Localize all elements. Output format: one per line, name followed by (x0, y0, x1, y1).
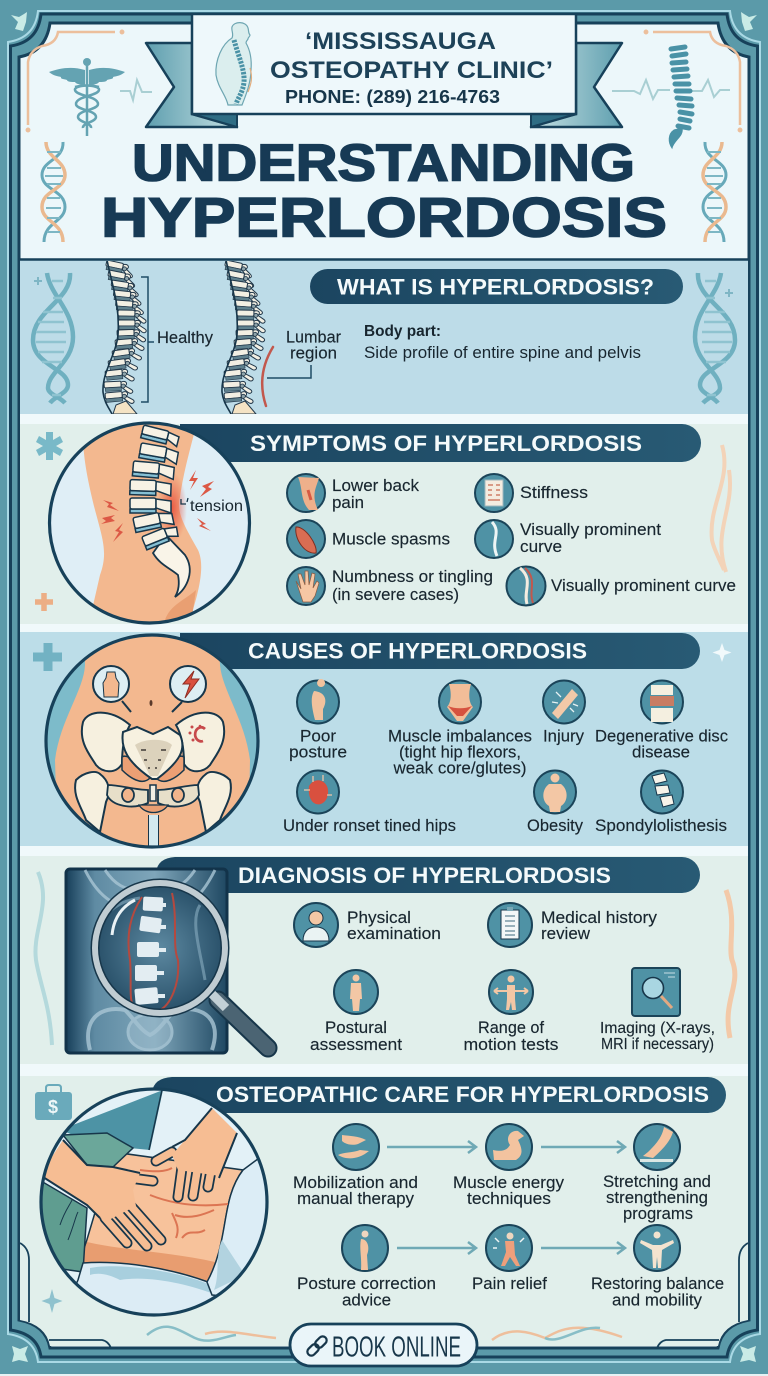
icon: link (306, 1335, 328, 1357)
inflammation mark (188, 725, 205, 742)
diagnosis: medical history: Medical history (541, 908, 658, 927)
icon: medical case (35, 1085, 72, 1120)
heading: WHAT IS HYPERLORDOSIS? (337, 274, 654, 300)
title: HYPERLORDOSIS (101, 186, 667, 248)
care: posture correction (297, 1225, 436, 1310)
icon: teal plus (33, 643, 62, 671)
arrow (397, 1242, 476, 1254)
panel: what is hyperlordosis (19, 259, 749, 424)
panel: osteopathic care (20, 1076, 748, 1346)
callout: spine joint (93, 666, 131, 712)
care: mobilization: manual therapy (297, 1189, 414, 1208)
care: posture correction: Posture correction (297, 1274, 436, 1293)
label: lumbar region (286, 328, 341, 362)
heading pill (156, 857, 700, 893)
symptom: stiffness: Stiffness (520, 483, 588, 502)
cause: injury: Injury (543, 726, 584, 746)
clinic name: ‘MISSISSAUGA (305, 28, 496, 55)
body part text (364, 323, 641, 362)
icon: DNA right (695, 273, 735, 403)
cause: muscle imbalances: Muscle imbalances (388, 726, 532, 746)
cause: degenerative disc (595, 680, 728, 762)
arrow (541, 1141, 625, 1153)
icon: red lumbar curve (262, 347, 273, 406)
body part text: Side profile of entire spine and pelvis (364, 344, 641, 362)
symptom: numbness (287, 567, 493, 605)
symptom: lower back pain (287, 474, 419, 512)
header (27, 31, 741, 242)
label: lumbar region: Lumbar (286, 328, 341, 346)
cause: poor posture: Poor (300, 726, 336, 746)
care: restoring balance (591, 1225, 724, 1310)
label: BOOK ONLINE (332, 1332, 461, 1364)
icon: medical star (36, 432, 63, 460)
icon: DNA left (42, 142, 65, 242)
cause: spondylolisthesis (595, 770, 727, 835)
symptom: prominent curve two: Visually prominent curve (551, 576, 736, 595)
arrow (387, 1141, 476, 1153)
diagnosis: range of motion (464, 970, 558, 1054)
heading pill (180, 424, 701, 462)
icon: pain bolts (101, 470, 214, 542)
care: stretching (603, 1124, 711, 1223)
diagnosis: imaging (600, 968, 715, 1053)
pointer line (267, 365, 311, 378)
illustration: pelvis (46, 630, 258, 860)
book online button (290, 1324, 477, 1366)
care: mobilization (293, 1124, 418, 1208)
cause: obesity (527, 770, 583, 835)
symptom: lower back pain: Lower back (332, 476, 419, 495)
callout: lightning pain (170, 666, 206, 712)
diagnosis: range of motion: motion tests (464, 1035, 558, 1054)
diagnosis: physical examination: examination (347, 924, 441, 943)
icon: sparkle (712, 643, 732, 662)
care: stretching: Stretching and (603, 1172, 711, 1191)
care: muscle energy: Muscle energy (453, 1173, 564, 1192)
diagnosis: medical history (488, 903, 658, 947)
heading: SYMPTOMS OF HYPERLORDOSIS (250, 431, 642, 456)
icon: ECG line right (612, 80, 730, 99)
symptom: prominent curve (475, 520, 661, 558)
heading pill (310, 269, 683, 304)
bracket (141, 277, 154, 402)
diagnosis: medical history: review (541, 924, 591, 943)
symptom: lower back pain: pain (332, 493, 364, 512)
cause: obesity: Obesity (527, 816, 583, 835)
illustration: lower spine close-up (50, 415, 250, 640)
heading pill (180, 633, 700, 669)
care: restoring balance: and mobility (612, 1290, 702, 1310)
panel: diagnosis (12, 856, 756, 1366)
care: pain relief (472, 1225, 547, 1293)
heading: OSTEOPATHIC CARE FOR HYPERLORDOSIS (216, 1082, 709, 1107)
corner ornaments bottom (12, 1346, 756, 1362)
wave decoration (712, 445, 730, 572)
cause: muscle imbalances (388, 680, 532, 778)
symptom: prominent curve: Visually prominent (520, 520, 661, 539)
care: muscle energy: techniques (467, 1189, 551, 1208)
symptom: numbness: Numbness or tingling (332, 567, 493, 586)
care: pain relief: Pain relief (472, 1274, 547, 1293)
arrow (541, 1242, 625, 1254)
diagnosis: range of motion: Range of (478, 1018, 544, 1037)
icon: spine right (669, 47, 692, 148)
chart: healthy spine (103, 260, 146, 414)
cause: poor posture: posture (289, 742, 347, 762)
heading pill (152, 1077, 726, 1113)
title (101, 134, 667, 248)
care: muscle energy (453, 1124, 564, 1208)
banner plate (192, 14, 576, 114)
icon: body with spine (216, 23, 251, 105)
clinic name: PHONE: (289) 216-4763 (285, 87, 500, 107)
clinic name (270, 28, 553, 107)
diagnosis: physical examination: Physical (347, 908, 411, 927)
symptom: muscle spasms: Muscle spasms (332, 530, 450, 548)
icon: DNA right (703, 142, 726, 242)
icon: orange plus (35, 593, 53, 611)
cause: muscle imbalances: weak core/glutes) (393, 758, 526, 778)
cause: muscle imbalances: (tight hip flexors, (399, 742, 521, 762)
icon: DNA left (33, 273, 73, 403)
icon: caduceus (49, 58, 125, 136)
symptom: prominent curve two (506, 566, 736, 606)
care: stretching: programs (623, 1204, 693, 1223)
chart: hyperlordotic spine (222, 260, 265, 414)
cause: poor posture (289, 679, 347, 762)
heading: DIAGNOSIS OF HYPERLORDOSIS (238, 863, 611, 888)
diagnosis: postural assessment (310, 970, 402, 1054)
ribbon left (146, 43, 237, 127)
icon: medical case: $ (48, 1097, 58, 1117)
label: lumbar region: region (290, 344, 337, 362)
icon: ECG line (120, 80, 152, 100)
cause: injury (543, 680, 585, 746)
care: posture correction: advice (342, 1290, 391, 1310)
wave decoration right (726, 890, 735, 1038)
cause: spondylolisthesis: Spondylolisthesis (595, 816, 727, 835)
cause: under ronset tined hips: Under ronset tined hips (283, 816, 456, 835)
diagnosis: physical examination (294, 903, 441, 947)
title: UNDERSTANDING (132, 134, 635, 192)
clinic name: OSTEOPATHY CLINIC’ (270, 57, 553, 84)
body part text: Body part: (364, 323, 441, 340)
panel: causes (12, 630, 756, 1366)
illustration: hands on back (36, 1089, 270, 1320)
banner (146, 14, 622, 127)
care: restoring balance: Restoring balance (591, 1274, 724, 1293)
care: stretching: strengthening (606, 1188, 708, 1207)
cause: degenerative disc: Degenerative disc (595, 726, 728, 746)
symptom: stiffness (475, 474, 588, 512)
wave decoration bottom (147, 1327, 622, 1341)
symptom: prominent curve: curve (520, 537, 562, 556)
wave decoration left (35, 872, 52, 1045)
label: healthy: Healthy (157, 328, 213, 347)
diagnosis: imaging: MRI if necessary) (601, 1036, 714, 1053)
diagnosis: postural assessment: assessment (310, 1035, 402, 1054)
diagnosis: imaging: Imaging (X-rays, (600, 1020, 715, 1037)
heading: CAUSES OF HYPERLORDOSIS (248, 638, 587, 664)
orange corner ornaments (27, 31, 741, 131)
symptom: numbness: (in severe cases) (332, 585, 459, 604)
diagnosis: postural assessment: Postural (325, 1018, 387, 1037)
care: mobilization: Mobilization and (293, 1173, 418, 1192)
panel: symptoms (12, 415, 756, 1366)
symptom: muscle spasms (287, 520, 450, 558)
illustration: x-ray with magnifier (66, 869, 268, 1053)
cause: degenerative disc: disease (632, 742, 690, 762)
cause: under ronset tined hips (283, 770, 456, 835)
bottom frame trims (20, 1243, 748, 1348)
ribbon right (531, 43, 622, 127)
label: tension: tension (190, 498, 243, 515)
icon: plus marks (34, 277, 733, 297)
icon: sparkle (42, 1289, 62, 1313)
